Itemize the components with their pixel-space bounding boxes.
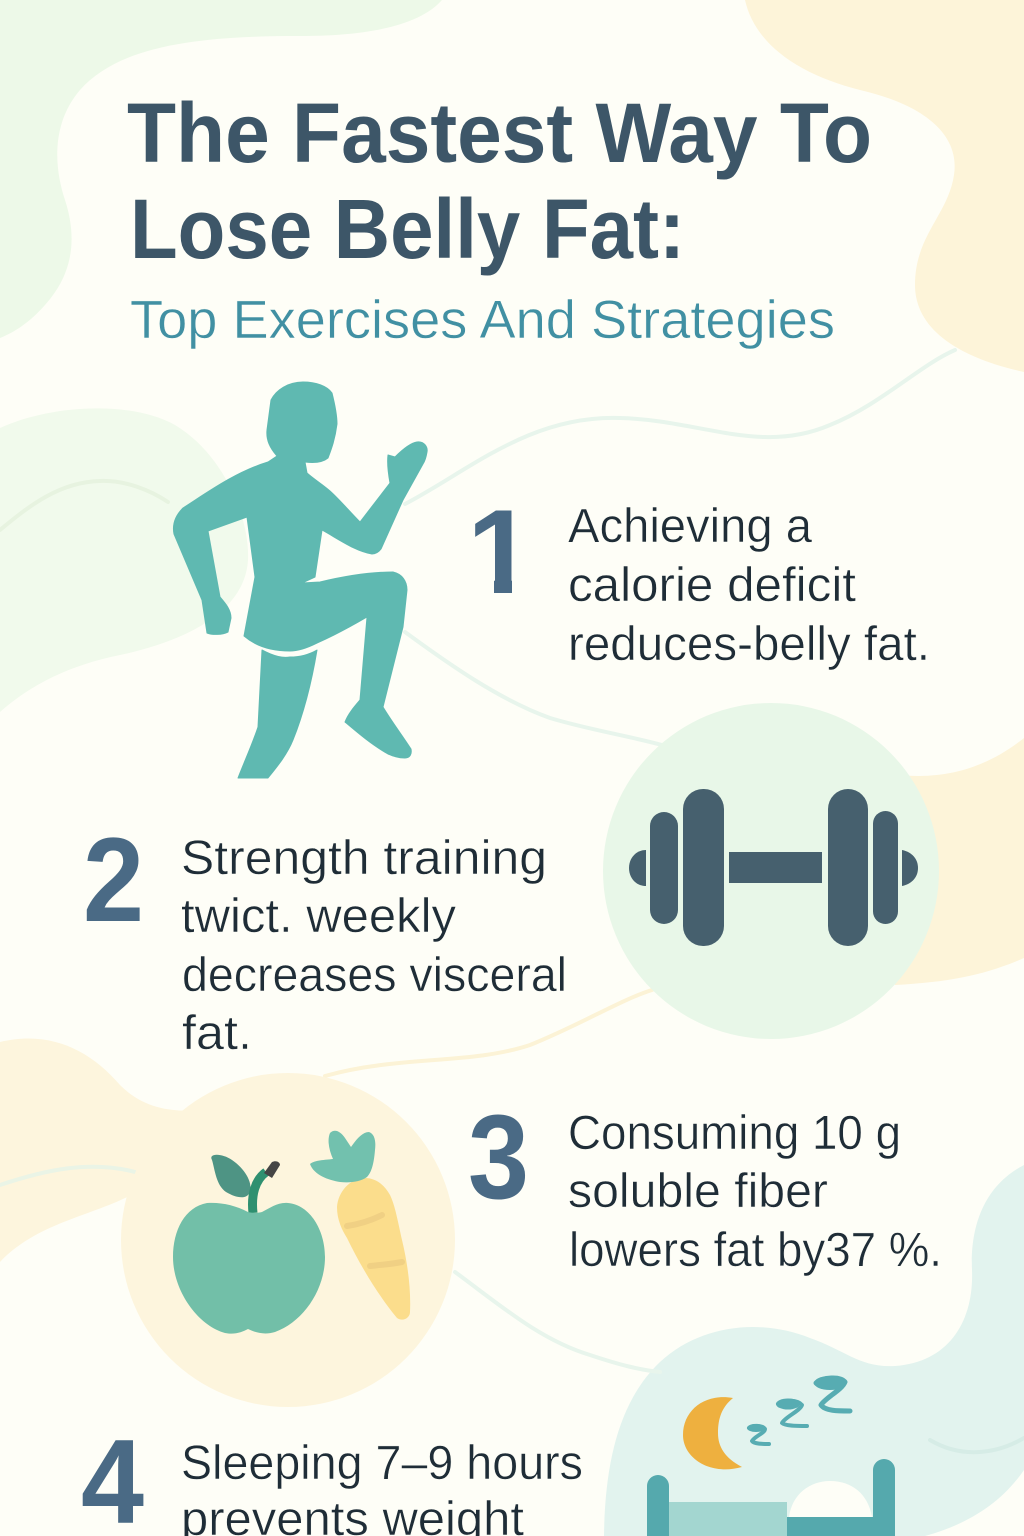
number 1: 1 xyxy=(467,485,534,619)
icon circle: dumbbell xyxy=(603,703,939,1039)
subtitle: Top Exercises And Strategies xyxy=(130,290,835,350)
apple xyxy=(173,1155,325,1334)
step 3 text: soluble fiber xyxy=(568,1165,828,1218)
background blob: left lower peach xyxy=(0,1039,200,1262)
background blob: left middle green xyxy=(0,408,248,712)
step 3 text: lowers fat by37 %. xyxy=(569,1224,942,1277)
title xyxy=(127,86,872,276)
step 2 text: decreases visceral xyxy=(182,949,567,1002)
number 3: 3 xyxy=(468,1090,529,1224)
step 2 text: Strength training xyxy=(181,832,547,885)
step 1 xyxy=(475,507,926,670)
icon: running figure xyxy=(173,382,427,778)
background blob: right middle peach xyxy=(895,738,1024,985)
step 2 text: fat. xyxy=(182,1007,252,1060)
step 2 text xyxy=(181,832,567,1060)
background blob: bottom right teal xyxy=(604,1165,1024,1536)
step 2 xyxy=(83,813,567,1060)
step 3 text xyxy=(568,1107,942,1277)
title: The Fastest Way To xyxy=(127,86,872,180)
background blob: top right peach xyxy=(745,0,1024,372)
step 4 xyxy=(81,1415,583,1536)
moon xyxy=(683,1397,742,1469)
bed xyxy=(647,1459,895,1536)
decorative connector curves xyxy=(0,350,1024,1452)
icon circle: apple and carrot xyxy=(121,1073,455,1407)
step 2 text: twict. weekly xyxy=(181,890,456,943)
sleep letters z xyxy=(747,1376,850,1444)
background blob: top left green xyxy=(0,0,442,338)
step 1 text: Achieving a xyxy=(568,500,812,553)
icon: sleep scene xyxy=(647,1376,895,1536)
step 4 text xyxy=(181,1437,583,1536)
number 2: 2 xyxy=(83,813,144,947)
step 1 text xyxy=(568,500,930,671)
title: Lose Belly Fat: xyxy=(130,182,685,276)
step 4 text: Sleeping 7–9 hours xyxy=(181,1437,583,1490)
carrot xyxy=(310,1131,410,1320)
step 3 text: Consuming 10 g xyxy=(568,1107,901,1160)
step 3 xyxy=(468,1090,942,1277)
step 1 text: reduces-belly fat. xyxy=(568,618,930,671)
step 1 text: calorie deficit xyxy=(568,559,856,612)
